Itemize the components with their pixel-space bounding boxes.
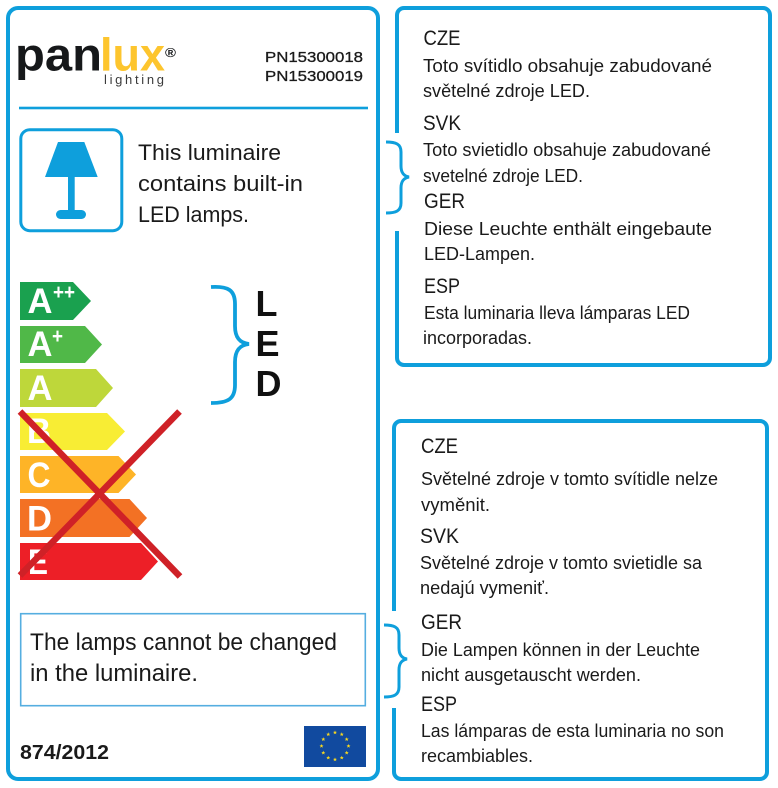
text: CZE: Světelné zdroje v tomto svítidle nelze bbox=[421, 469, 718, 489]
callout: lamps cannot be changed: The lamps cannot be changed bbox=[30, 629, 337, 656]
text: SVK: SVK bbox=[423, 112, 461, 135]
text: ESP: Las lámparas de esta luminaria no son bbox=[421, 721, 724, 741]
text: LED vertical: L bbox=[256, 283, 278, 324]
text: CZE: CZE bbox=[424, 27, 460, 50]
text: built-in lamps: This luminaire bbox=[138, 140, 281, 165]
text: ESP: recambiables. bbox=[421, 746, 533, 766]
energy class scale bbox=[20, 281, 158, 582]
text: ESP bbox=[423, 275, 690, 348]
text: LED vertical: D bbox=[256, 363, 282, 404]
logo: panlux lighting: pan bbox=[15, 28, 102, 80]
class C bbox=[20, 456, 136, 495]
panel: translations built-in lamps bbox=[386, 8, 770, 365]
class A+: A bbox=[28, 325, 52, 364]
text: SVK: SVK bbox=[420, 525, 459, 548]
callout: lamps cannot be changed: in the luminaire. bbox=[30, 660, 198, 687]
class A++: A bbox=[28, 282, 52, 321]
class A++: ++ bbox=[53, 281, 75, 304]
product codes: PN15300018 bbox=[265, 49, 363, 66]
brace: LED classes bbox=[211, 287, 249, 403]
text: SVK bbox=[423, 112, 711, 186]
class B: B bbox=[27, 412, 51, 451]
text: CZE: vyměnit. bbox=[421, 495, 490, 515]
panel: main label bbox=[8, 8, 378, 779]
text: SVK: Světelné zdroje v tomto svietidle sa bbox=[420, 553, 703, 573]
class E bbox=[20, 543, 158, 582]
text: built-in lamps bbox=[138, 140, 303, 227]
text: built-in lamps: LED lamps. bbox=[138, 202, 249, 227]
text: GER: GER bbox=[421, 611, 462, 634]
text: SVK bbox=[420, 525, 703, 598]
logo: panlux lighting: ® bbox=[165, 45, 176, 60]
text: GER: Diese Leuchte enthält eingebaute bbox=[424, 219, 712, 239]
red cross bbox=[20, 412, 180, 576]
text: ESP: ESP bbox=[421, 693, 457, 716]
text: GER bbox=[421, 611, 700, 685]
product codes bbox=[265, 49, 363, 85]
regulation number: 874/2012 bbox=[20, 742, 109, 764]
class A bbox=[20, 369, 113, 408]
text: SVK: svetelné zdroje LED. bbox=[423, 166, 583, 186]
logo: panlux lighting: lighting bbox=[104, 72, 164, 87]
text: SVK: Toto svietidlo obsahuje zabudované bbox=[423, 140, 711, 160]
text: ESP: Esta luminaria lleva lámparas LED bbox=[424, 303, 690, 323]
class E: E bbox=[28, 543, 48, 582]
text: SVK: nedajú vymeniť. bbox=[420, 578, 549, 598]
text: GER: GER bbox=[424, 190, 465, 213]
class A++ bbox=[20, 281, 91, 321]
class B bbox=[20, 412, 125, 451]
text: CZE: světelné zdroje LED. bbox=[423, 81, 590, 101]
text: CZE: Toto svítidlo obsahuje zabudované bbox=[423, 56, 712, 76]
class A+: + bbox=[52, 325, 63, 348]
text: CZE bbox=[423, 27, 712, 101]
text: CZE: CZE bbox=[421, 435, 458, 458]
text: LED vertical bbox=[256, 283, 282, 404]
text: ESP bbox=[421, 693, 724, 766]
logo: panlux lighting: lux bbox=[100, 28, 165, 80]
product codes: PN15300019 bbox=[265, 68, 363, 85]
text: GER bbox=[424, 190, 712, 264]
class A: A bbox=[28, 369, 52, 408]
text: ESP: incorporadas. bbox=[423, 328, 532, 348]
text: ESP: ESP bbox=[424, 275, 460, 298]
brace: upper bbox=[386, 142, 409, 213]
text: LED vertical: E bbox=[256, 323, 280, 364]
text: GER: Die Lampen können in der Leuchte bbox=[421, 640, 700, 660]
class D: D bbox=[27, 500, 52, 538]
icon: EU flag bbox=[304, 726, 366, 767]
text: CZE bbox=[421, 435, 718, 515]
class A+ bbox=[20, 325, 102, 364]
class D bbox=[20, 499, 147, 538]
icon: table lamp bbox=[21, 130, 122, 231]
brace: lower bbox=[384, 625, 407, 697]
logo: panlux lighting bbox=[15, 28, 176, 87]
callout: lamps cannot be changed bbox=[21, 614, 365, 706]
panel: translations lamps not changeable bbox=[384, 421, 767, 779]
text: built-in lamps: contains built-in bbox=[138, 171, 303, 196]
text: GER: nicht ausgetauscht werden. bbox=[421, 665, 641, 685]
class C: C bbox=[28, 456, 50, 495]
text: GER: LED-Lampen. bbox=[424, 244, 535, 264]
